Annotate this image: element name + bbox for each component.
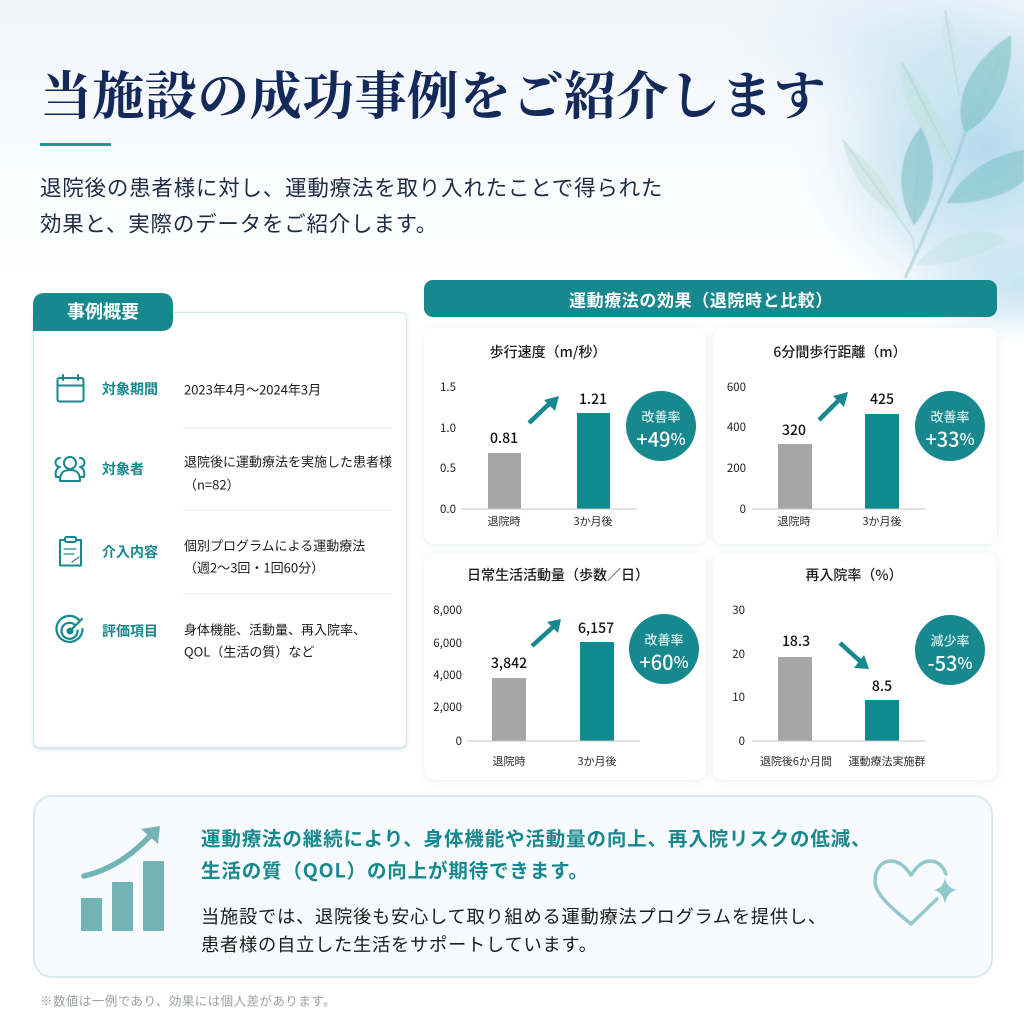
- panel: daily activity chart: 退院時: [492, 753, 526, 769]
- subtitle: 退院後の患者様に対し、運動療法を取り入れたことで得られた: [40, 172, 663, 202]
- panel: six minute walk chart: [713, 328, 997, 544]
- tab heading: 事例概要: [67, 298, 139, 324]
- panel: six minute walk chart: 6分間歩行距離（m）: [773, 342, 907, 362]
- row: evaluation: 身体機能、活動量、再入院率、: [184, 620, 366, 638]
- row: evaluation: 評価項目: [102, 621, 158, 641]
- badge: +60%: +60%: [639, 646, 689, 676]
- badge: +33%: [915, 391, 985, 461]
- panel: daily activity chart: 4,000: [433, 667, 462, 683]
- row: target: 対象者: [102, 459, 144, 479]
- panel: six minute walk chart: 200: [727, 460, 746, 476]
- arrow: down: [840, 643, 869, 669]
- row: intervention: 個別プログラムによる運動療法: [184, 536, 365, 554]
- section header: effects: [424, 280, 997, 317]
- row: period: 対象期間: [102, 379, 158, 399]
- badge: +49%: [626, 391, 696, 461]
- panel: case overview: [33, 293, 406, 748]
- panel: walking speed chart: 1.21: [579, 389, 607, 409]
- panel: readmission chart: 再入院率（%）: [805, 565, 903, 585]
- panel: daily activity chart: 8,000: [433, 602, 462, 618]
- icon: growth chart: [81, 826, 164, 931]
- panel: daily activity chart: 6,000: [433, 635, 462, 651]
- arrow: up: [819, 392, 848, 420]
- badge: +33%: +33%: [925, 424, 975, 452]
- row: evaluation: QOL（生活の質）など: [184, 642, 314, 660]
- summary heading: 運動療法の継続により、身体機能や活動量の向上、再入院リスクの低減、: [201, 822, 871, 852]
- summary heading: 生活の質（QOL）の向上が期待できます。: [201, 854, 589, 884]
- panel: six minute walk chart: 0: [740, 501, 746, 517]
- panel: daily activity chart: 日常生活活動量（歩数／日）: [467, 565, 649, 585]
- panel: readmission chart: 10: [732, 689, 745, 705]
- icon: clipboard: [60, 537, 81, 566]
- panel: walking speed chart: 3か月後: [573, 513, 613, 529]
- summary body: 当施設では、退院後も安心して取り組める運動療法プログラムを提供し、: [201, 903, 827, 929]
- panel: walking speed chart: 歩行速度（m/秒）: [490, 342, 606, 362]
- icon: people: [56, 457, 84, 481]
- panel: readmission chart: [713, 554, 997, 780]
- panel: daily activity chart: 6,157: [578, 618, 614, 638]
- panel: readmission chart: 8.5: [872, 676, 892, 696]
- badge: +60%: [629, 614, 699, 684]
- subtitle: [40, 172, 663, 238]
- summary body: [201, 903, 827, 957]
- panel: six minute walk chart: 400: [727, 419, 746, 435]
- panel: six minute walk chart: 425: [870, 389, 894, 409]
- panel: six minute walk chart: 320: [782, 420, 806, 440]
- row: target: [56, 452, 392, 494]
- arrow: up: [529, 396, 559, 423]
- panel: summary: [34, 796, 992, 977]
- panel: six minute walk chart: 3か月後: [862, 513, 902, 529]
- badge: +49%: +49%: [636, 424, 686, 452]
- badge: -53%: -53%: [928, 648, 972, 676]
- icon: target: [57, 616, 82, 642]
- badge: +33%: 改善率: [930, 406, 970, 426]
- section header: effects: 運動療法の効果（退院時と比較）: [569, 286, 833, 312]
- panel: readmission chart: 運動療法実施群: [848, 753, 926, 769]
- title: 当施設の成功事例をご紹介します: [40, 54, 826, 130]
- panel: walking speed chart: 0.81: [490, 428, 518, 448]
- row: evaluation: [57, 616, 366, 660]
- panel: daily activity chart: 3か月後: [577, 753, 617, 769]
- panel: walking speed chart: 1.0: [440, 420, 456, 436]
- panel: readmission chart: 0: [739, 733, 745, 749]
- panel: six minute walk chart: 600: [727, 379, 746, 395]
- badge: -53%: 減少率: [930, 630, 970, 650]
- panel: daily activity chart: 0: [456, 733, 462, 749]
- panel: walking speed chart: 0.5: [440, 460, 456, 476]
- row: target: 退院後に運動療法を実施した患者様: [184, 452, 392, 470]
- row: period: 2023年4月～2024年3月: [184, 380, 321, 398]
- panel: readmission chart: 退院後6か月間: [760, 753, 832, 769]
- footnote: ※数値は一例であり、効果には個人差があります。: [40, 990, 336, 1010]
- row: target: （n=82）: [184, 474, 240, 494]
- summary heading: [201, 822, 871, 884]
- decorative leaves: [842, 8, 1024, 278]
- arrow: up: [532, 619, 561, 646]
- badge: +60%: 改善率: [644, 630, 684, 648]
- panel: walking speed chart: 退院時: [488, 513, 520, 529]
- panel: daily activity chart: 2,000: [433, 699, 462, 715]
- subtitle: 効果と、実際のデータをご紹介します。: [40, 208, 438, 238]
- panel: daily activity chart: 3,842: [491, 653, 527, 673]
- badge: +49%: 改善率: [641, 406, 681, 426]
- panel: walking speed chart: [424, 328, 706, 544]
- panel: readmission chart: 18.3: [782, 631, 810, 651]
- row: intervention: [60, 536, 365, 576]
- panel: six minute walk chart: 退院時: [778, 513, 810, 529]
- panel: walking speed chart: 1.5: [440, 379, 456, 395]
- tab heading: [33, 293, 173, 331]
- panel: readmission chart: 30: [732, 602, 745, 618]
- summary body: 患者様の自立した生活をサポートしています。: [201, 931, 598, 957]
- icon: heart with sparkle: [875, 861, 957, 924]
- row: period: [58, 375, 321, 402]
- panel: daily activity chart: [424, 554, 706, 780]
- panel: readmission chart: 20: [732, 646, 745, 662]
- icon: calendar: [58, 375, 84, 402]
- row: intervention: 介入内容: [102, 542, 158, 562]
- panel: walking speed chart: 0.0: [440, 501, 456, 517]
- badge: -53%: [915, 615, 985, 685]
- row: intervention: （週2～3回・1回60分）: [184, 558, 324, 576]
